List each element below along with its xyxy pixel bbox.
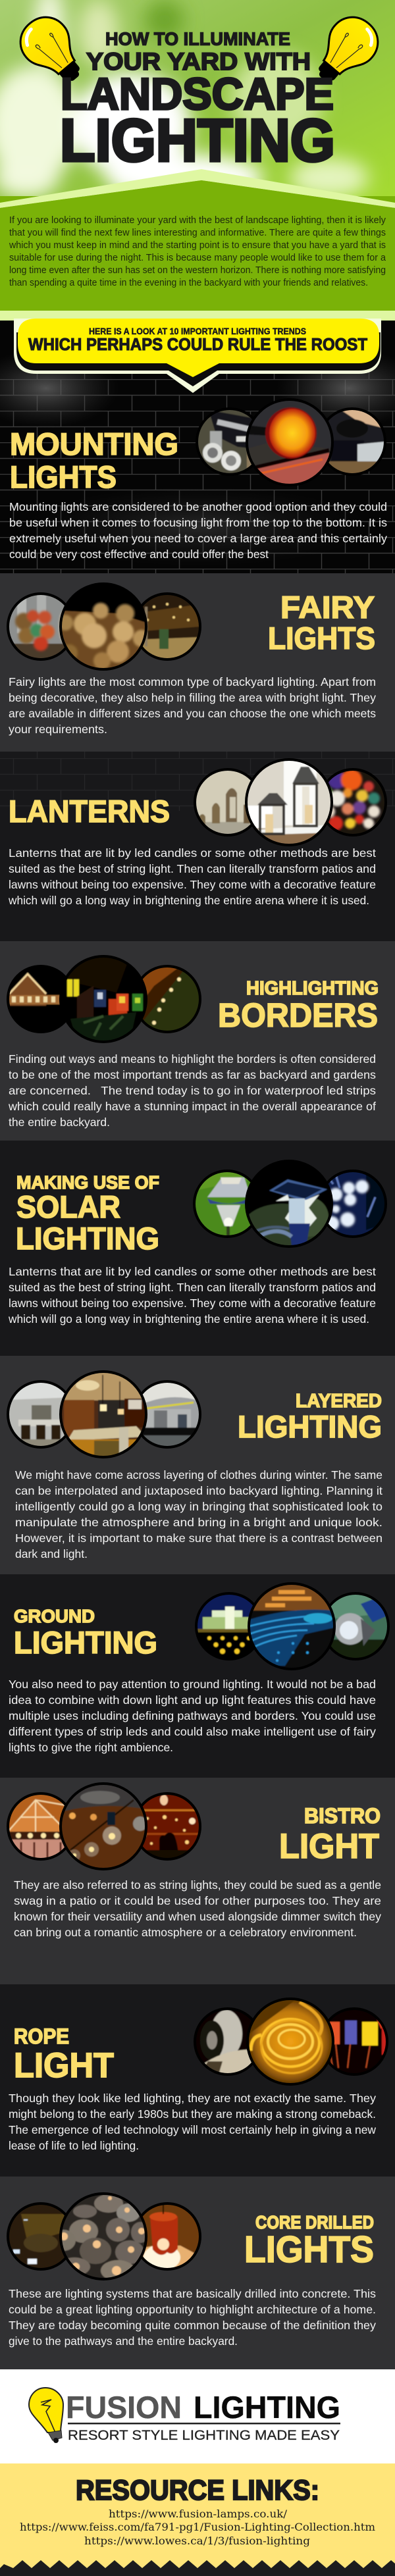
body text: highlighting borders — [8, 1052, 376, 1129]
heading: ground lighting: GROUND — [14, 1606, 95, 1626]
body text: highlighting borders: which could really have a stunning impact in the overall appearance of — [8, 1100, 376, 1113]
body text: solar lighting: Lanterns that are lit by led candles or some other methods are best — [9, 1265, 376, 1278]
body text: mounting lights: Mounting lights are considered to be another good option and they could — [9, 500, 387, 513]
body text: rope light: Though they look like led lighting, they are not exactly the same. They — [9, 2092, 376, 2105]
speech banner: HERE IS A LOOK AT 10 IMPORTANT LIGHTING TRENDS — [89, 326, 306, 336]
heading: layered lighting: LAYERED — [296, 1391, 382, 1412]
title: LANDSCAPE — [61, 69, 334, 119]
heading: solar lighting: LIGHTING — [16, 1221, 159, 1256]
heading: rope light: ROPE — [14, 2024, 69, 2048]
intro text: If you are looking to illuminate your yard with the best of landscape lighting, then it is likely — [9, 215, 386, 226]
heading: fairy lights: FAIRY — [280, 590, 375, 625]
logo text: RESORT STYLE LIGHTING MADE EASY — [68, 2428, 340, 2443]
body text: ground lighting — [9, 1678, 376, 1754]
body text: lanterns: Lanterns that are lit by led candles or some other methods are best — [9, 846, 376, 860]
heading: core drilled lights — [244, 2212, 374, 2271]
heading: ground lighting: LIGHTING — [14, 1625, 157, 1660]
heading: core drilled lights: LIGHTS — [244, 2228, 374, 2271]
photos: layered lighting — [8, 1372, 200, 1457]
body text: solar lighting — [8, 1265, 376, 1326]
photos: bistro light — [8, 1784, 200, 1869]
body text: lanterns: suited as the best of string light. Then can literally transform patios and — [9, 862, 376, 875]
body text: core drilled lights: give to the pathways and the entire backyard. — [9, 2334, 238, 2348]
panel: bistro light — [0, 1778, 395, 1984]
intro text — [9, 215, 386, 288]
intro text: suitable for use during the night. This is because many people would like to use them for a — [9, 252, 386, 263]
body text: ground lighting: different types of strip leds and could also make intelligent use of fairy — [9, 1725, 376, 1738]
panel: mounting lights — [0, 311, 395, 573]
heading: core drilled lights: CORE DRILLED — [255, 2212, 374, 2232]
body text: solar lighting: which will go a long way in brightening the entire arena where it is used. — [8, 1312, 369, 1326]
heading: bistro light: BISTRO — [304, 1804, 381, 1828]
body text: ground lighting: You also need to pay attention to ground lighting. It would not be a bad — [9, 1678, 376, 1691]
body text: layered lighting: can be interpolated and juxtaposed into backyard lighting. Planning it — [15, 1484, 382, 1497]
title: YOUR YARD WITH — [86, 48, 311, 75]
body text: bistro light: They are also referred to as string lights, they could be sued as a gentle — [14, 1878, 381, 1892]
links: https://www.fusion-lamps.co.uk/ — [109, 2508, 288, 2520]
panel: layered lighting — [0, 1356, 395, 1574]
heading: highlighting borders: HIGHLIGHTING — [246, 978, 379, 999]
body text: ground lighting: multiple uses including defining pathways and borders. You could use — [9, 1709, 376, 1722]
photos: solar lighting — [194, 1161, 386, 1250]
zigzag footer edge — [0, 2560, 395, 2576]
body text: fairy lights: Fairy lights are the most common type of backyard lighting. Apart from — [9, 675, 376, 688]
body text: bistro light: known for their versatility and when used alongside dimmer switch they — [14, 1910, 381, 1923]
intro text: that you will find the next few lines interesting and informative. There are quite a few things — [9, 227, 386, 238]
body text: lanterns — [8, 846, 376, 907]
heading: fairy lights — [268, 590, 375, 656]
body text: layered lighting: dark and light. — [15, 1547, 88, 1560]
heading: ground lighting — [14, 1606, 157, 1660]
body text: highlighting borders: Finding out ways and means to highlight the borders is often considered — [9, 1052, 376, 1066]
panel: core drilled lights — [0, 2177, 395, 2369]
heading: solar lighting: SOLAR — [16, 1189, 120, 1224]
body text: rope light: The emergence of led technology will most certainly help in giving a new — [9, 2123, 376, 2136]
body text: core drilled lights — [9, 2287, 376, 2348]
photos: mounting lights — [197, 399, 385, 485]
heading: bistro light — [279, 1804, 381, 1866]
body text: lanterns: which will go a long way in brightening the entire arena where it is used. — [8, 894, 369, 907]
photos: highlighting borders — [8, 956, 200, 1042]
icon: left light bulb — [11, 8, 95, 94]
panel: solar lighting — [9, 1160, 387, 1326]
icon: logo bulb — [29, 2388, 63, 2443]
panel: ground lighting — [9, 1582, 390, 1753]
body text: ground lighting: idea to combine with down light and up light features this could have — [9, 1693, 376, 1707]
heading: highlighting borders — [218, 978, 379, 1034]
body text: mounting lights: could be very cost effective and could offer the best — [9, 548, 269, 561]
body text: solar lighting: suited as the best of string light. Then can literally transform patios and — [9, 1281, 376, 1294]
body text: highlighting borders: to be one of the most important trends as far as backyard and gardens — [9, 1068, 376, 1081]
links — [20, 2508, 375, 2547]
body text: fairy lights: your requirements. — [9, 723, 107, 736]
body text: layered lighting: However, it is important to make sure that there is a contrast between — [15, 1532, 382, 1545]
body text: fairy lights: are available in different sizes and you can choose the one which meets — [9, 707, 376, 720]
title — [60, 29, 335, 174]
body text: highlighting borders: the entire backyard. — [9, 1116, 110, 1129]
panel: lanterns — [0, 752, 395, 907]
body text: bistro light: swag in a patio or it could be used for other purposes too. They are — [14, 1894, 381, 1907]
heading: lanterns: LANTERNS — [9, 794, 170, 829]
body text: mounting lights: be useful when it comes to focusing light from the top to the bottom. It is — [9, 516, 387, 529]
heading: highlighting borders: BORDERS — [218, 996, 378, 1034]
heading: resource links: RESOURCE LINKS: — [76, 2475, 319, 2506]
body text: core drilled lights: These are lighting systems that are basically drilled into concrete. This — [9, 2287, 376, 2300]
body text: highlighting borders: are concerned. The trend today is to go in for waterproof led strips — [9, 1084, 376, 1097]
body text: layered lighting: manipulate the atmosphere and bring in a bright and unique look. — [15, 1516, 382, 1529]
body text: layered lighting: We might have come across layering of clothes during winter. The same — [15, 1468, 382, 1481]
heading: mounting lights — [10, 426, 178, 494]
heading: layered lighting — [238, 1391, 382, 1444]
links: https://www.feiss.com/fa791-pg1/Fusion-Lighting-Collection.htm — [20, 2521, 375, 2533]
photos: core drilled lights — [8, 2194, 200, 2281]
panel: rope light — [9, 1997, 388, 2152]
panel: header — [0, 0, 395, 204]
panel: highlighting borders — [0, 941, 395, 1141]
body text: layered lighting — [15, 1468, 382, 1560]
photos: rope light — [195, 1999, 387, 2084]
body text: core drilled lights: They are today becoming quite common because of the definition they — [9, 2319, 376, 2332]
logo text — [66, 2390, 340, 2443]
heading: rope light: LIGHT — [14, 2046, 114, 2085]
heading: bistro light: LIGHT — [279, 1827, 379, 1866]
body text: mounting lights: extremely useful when you need to cover a large area and this certainly — [9, 532, 387, 545]
photos: fairy lights — [8, 584, 200, 669]
panel: resource links — [0, 2463, 395, 2576]
links: https://www.lowes.ca/1/3/fusion-lighting — [84, 2535, 310, 2547]
body text: fairy lights — [9, 675, 376, 736]
body text: bistro light: can bring out a romantic atmosphere or a celebratory environment. — [14, 1926, 357, 1939]
heading: solar lighting: MAKING USE OF — [16, 1172, 159, 1193]
panel: introduction — [0, 169, 395, 311]
icon: right light bulb — [303, 8, 387, 94]
logo text: FUSION — [66, 2390, 182, 2425]
panel: fairy lights — [0, 573, 395, 752]
photos: ground lighting — [196, 1584, 388, 1669]
heading: fairy lights: LIGHTS — [268, 621, 375, 656]
photos: lanterns — [195, 760, 386, 846]
body text: rope light: lease of life to led lighting. — [9, 2139, 139, 2152]
body text: core drilled lights: could be a great lighting opportunity to highlight architecture of a home. — [9, 2303, 376, 2316]
body text: bistro light — [14, 1878, 381, 1939]
body text: layered lighting: intelligently could go a long way in bringing that sophisticated look to — [15, 1500, 382, 1513]
body text: lanterns: lawns without being too expensive. They come with a decorative feature — [9, 878, 376, 891]
speech banner: WHICH PERHAPS COULD RULE THE ROOST — [28, 336, 367, 354]
heading: rope light — [14, 2024, 114, 2085]
intro text: which you must keep in mind and the starting point is to ensure that you have a yard that is — [9, 240, 386, 251]
title: LIGHTING — [60, 108, 335, 174]
body text: solar lighting: lawns without being too expensive. They come with a decorative feature — [9, 1297, 376, 1310]
heading: solar lighting — [16, 1172, 159, 1256]
speech banner — [14, 319, 381, 393]
logo text: LIGHTING — [194, 2390, 340, 2425]
body text: ground lighting: lights to give the right ambience. — [9, 1741, 173, 1754]
body text: rope light: might belong to the early 1980s but they are making a strong comeback. — [9, 2107, 376, 2121]
heading: mounting lights: MOUNTING — [10, 426, 178, 461]
heading: mounting lights: LIGHTS — [10, 459, 117, 494]
body text: mounting lights — [9, 500, 387, 561]
heading: layered lighting: LIGHTING — [238, 1409, 382, 1444]
body text: fairy lights: being decorative, they also help in filling the area with bright light. They — [9, 691, 376, 704]
intro text: than spending a quite time in the evening in the backyard with your friends and relatives. — [9, 277, 368, 288]
title: HOW TO ILLUMINATE — [105, 29, 290, 49]
body text: rope light — [9, 2092, 376, 2152]
panel: logo — [0, 2369, 395, 2463]
